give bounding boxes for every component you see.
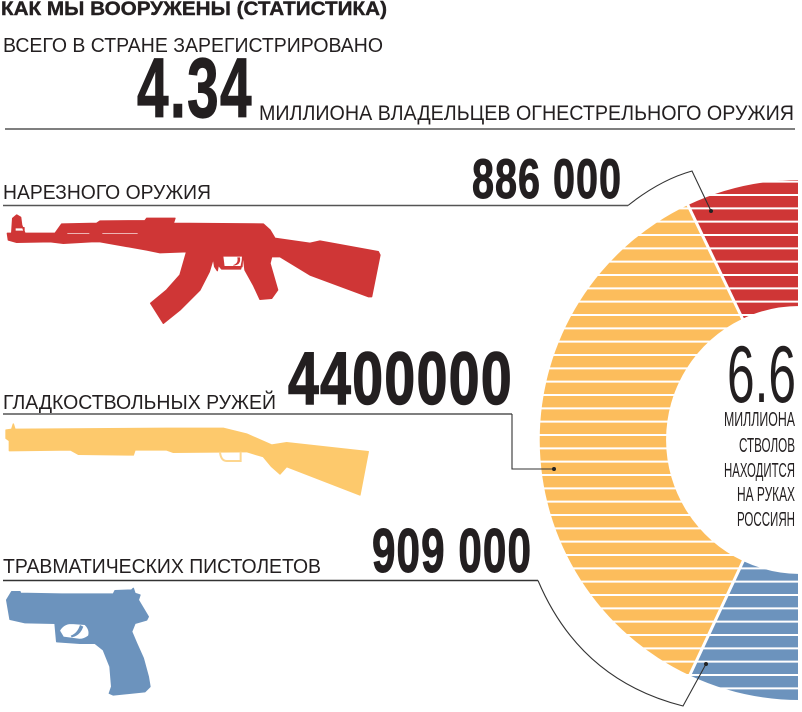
pistols leader line <box>3 580 708 706</box>
shotguns value: 4400000 <box>288 337 513 420</box>
donut segment: shotguns <box>540 205 743 676</box>
traumatic pistols row <box>3 517 708 706</box>
rifles row <box>3 147 713 323</box>
icon: shotgun <box>6 424 368 495</box>
rifles label: НАРЕЗНОГО ОРУЖИЯ <box>3 182 211 204</box>
shotguns row <box>3 337 556 495</box>
donut chart: 6.6 million guns <box>530 170 802 710</box>
pistols label: ТРАВМАТИЧЕСКИХ ПИСТОЛЕТОВ <box>3 556 321 578</box>
subtitle: registered in country: ВСЕГО В СТРАНЕ ЗАРЕГИСТРИРОВАНО <box>3 35 383 57</box>
big number: owners: 4.34 <box>137 41 253 135</box>
pistols value: 909 000 <box>372 517 532 586</box>
shotguns leader line <box>3 414 556 471</box>
center caption <box>724 409 795 531</box>
shotguns label: ГЛАДКОСТВОЛЬНЫХ РУЖЕЙ <box>3 390 276 414</box>
icon: pistol <box>7 588 150 695</box>
donut segment: traumatic pistols <box>690 561 800 700</box>
donut segment: rifles <box>688 180 800 319</box>
icon: assault rifle <box>7 215 380 323</box>
rifles leader line <box>3 171 713 213</box>
center total: 6.6 million guns <box>724 330 796 531</box>
rifles value: 886 000 <box>472 147 622 210</box>
